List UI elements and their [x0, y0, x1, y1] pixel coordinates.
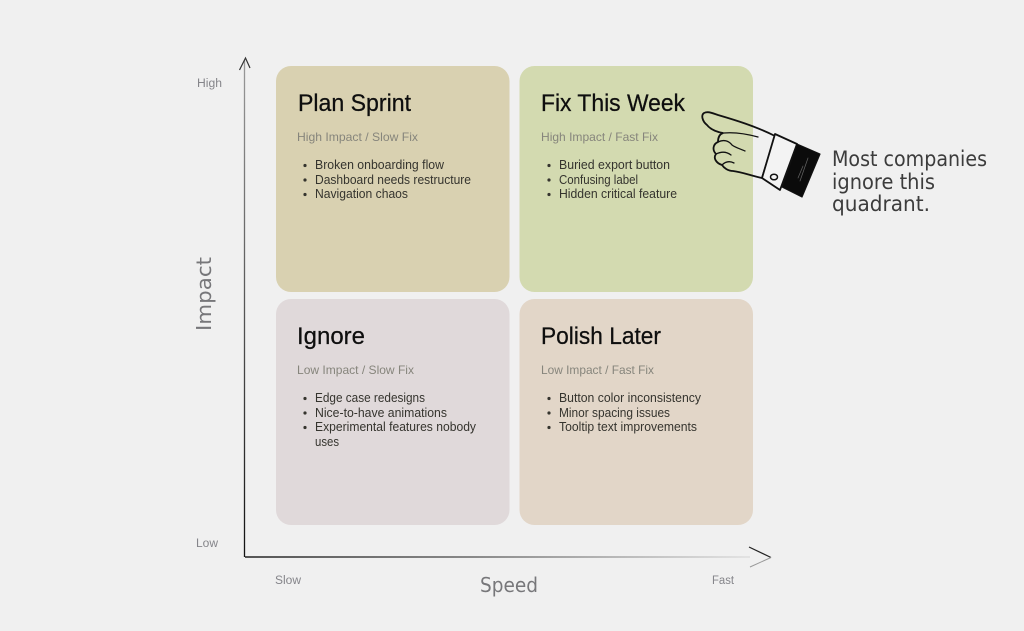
callout: handwritten note: Most companies [832, 147, 987, 171]
axis label: Slow: Slow [275, 575, 302, 587]
bullet list: Experimental features nobody [315, 420, 477, 434]
subtitle: Low Impact / Slow Fix [297, 363, 414, 377]
shirt cuff [762, 134, 797, 190]
bullet list: Navigation chaos [315, 187, 408, 201]
bullet list: Broken onboarding flow [315, 158, 445, 172]
subtitle: High Impact / Fast Fix [541, 130, 658, 144]
axis title: Speed: Speed [480, 573, 538, 597]
bullet list [547, 391, 702, 434]
black sleeve [782, 144, 820, 197]
bullet list: Tooltip text improvements [559, 420, 697, 434]
heading: Polish Later: Polish Later [541, 323, 661, 350]
axis label: Fast: Fast [712, 575, 735, 587]
bullet list [547, 158, 677, 201]
heading: Plan Sprint: Plan Sprint [298, 90, 411, 117]
axis label: Low: Low [196, 538, 219, 550]
axis label: High: High [197, 78, 222, 90]
vertical axis: impact [240, 58, 250, 557]
subtitle: Low Impact / Fast Fix [541, 363, 654, 377]
callout: handwritten note: quadrant. [832, 192, 930, 216]
bullet list: Hidden critical feature [559, 187, 677, 201]
panel: Ignore [276, 299, 510, 525]
bullet list: Button color inconsistency [559, 391, 702, 405]
callout: handwritten note: ignore this [832, 170, 935, 194]
panel: Plan Sprint [276, 66, 510, 292]
callout: handwritten note [832, 147, 987, 216]
axis title: Impact: Impact [192, 257, 216, 331]
bullet list [303, 391, 477, 449]
bullet list: Buried export button [559, 158, 670, 172]
subtitle: High Impact / Slow Fix [297, 130, 418, 144]
hand outline [702, 112, 775, 178]
bullet list [303, 158, 471, 201]
bullet list: Dashboard needs restructure [315, 173, 471, 187]
panel: Polish Later [520, 299, 753, 525]
bullet list: Nice-to-have animations [315, 406, 447, 420]
bullet list: Minor spacing issues [559, 406, 670, 420]
bullet list: Confusing label [559, 173, 638, 187]
heading: Ignore: Ignore [297, 323, 365, 350]
panel: Fix This Week [520, 66, 753, 292]
heading: Fix This Week: Fix This Week [541, 90, 686, 117]
bullet list: Edge case redesigns [315, 391, 425, 405]
bullet list: uses [315, 435, 339, 449]
horizontal axis: speed [245, 547, 771, 567]
icon: pointing hand [702, 112, 820, 197]
